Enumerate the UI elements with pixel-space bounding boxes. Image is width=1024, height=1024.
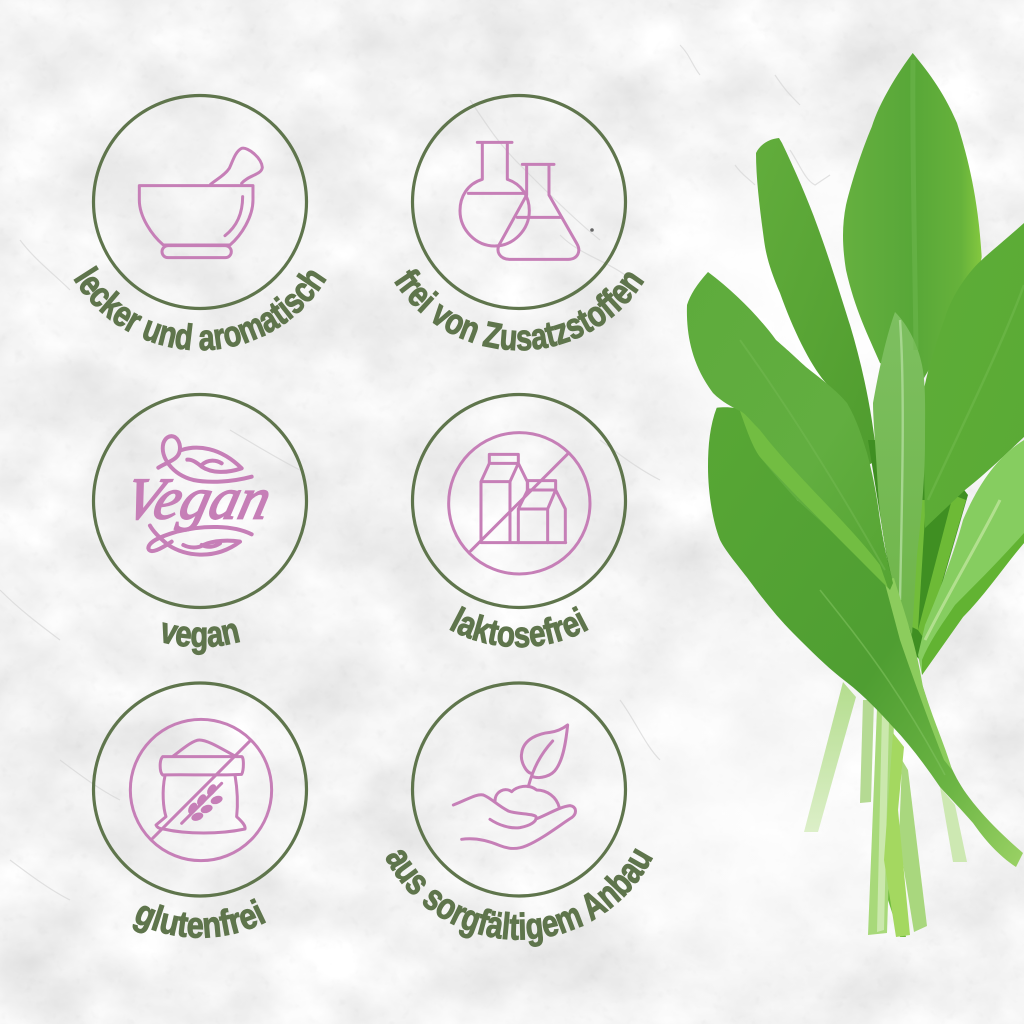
illustration: wild garlic bunch	[687, 53, 1024, 937]
badge ring	[412, 394, 626, 608]
leaf: lower right light	[918, 440, 1024, 675]
leaf: top centre	[843, 53, 982, 385]
leaf: narrow upper left	[756, 138, 877, 470]
icon: mortar and pestle	[139, 148, 262, 258]
label: frei von Zusatzstoffen: frei von Zusatzstoffen	[394, 269, 644, 351]
badge ring	[94, 683, 306, 896]
stem: crossing	[884, 578, 952, 770]
script word: Vegan	[118, 466, 278, 532]
panel: aus sorgfältigem Anbau	[386, 681, 654, 947]
icon: vegan script logo	[118, 436, 278, 555]
badge ring	[412, 683, 626, 896]
badge ring	[412, 96, 626, 308]
badge ring	[94, 96, 306, 308]
flourishes	[148, 436, 252, 555]
panel: vegan	[92, 392, 308, 656]
stems lower	[804, 682, 967, 937]
rib: centre leaf	[900, 320, 903, 600]
icon: no gluten flour bag	[130, 719, 272, 861]
rim: middle left leaf	[740, 411, 888, 588]
label: laktosefrei: laktosefrei	[449, 606, 589, 648]
rib: lower right leaf	[925, 500, 1000, 640]
rib: lower left leaf	[820, 590, 945, 775]
leaf: right large	[923, 223, 1024, 528]
label: lecker und aromatisch: lecker und aromatisch	[73, 265, 327, 351]
icon: no milk cartons	[449, 433, 590, 574]
leaf: lower left large	[708, 407, 1023, 867]
dark gap and upper stems	[868, 440, 968, 660]
panel: lecker und aromatisch	[73, 94, 327, 351]
label: glutenfrei: glutenfrei	[132, 898, 266, 938]
icon: hand with sprout	[453, 725, 575, 849]
rib: middle left leaf	[740, 340, 885, 570]
rib: top centre leaf	[913, 60, 916, 350]
label: vegan: vegan	[162, 622, 240, 656]
panel: frei von Zusatzstoffen	[394, 94, 644, 351]
icon: laboratory flasks	[460, 142, 579, 259]
panel: glutenfrei	[92, 681, 308, 938]
leaf: centre light	[873, 312, 925, 635]
leaf: middle left	[687, 272, 893, 590]
panel: laktosefrei	[410, 392, 628, 648]
leaf edge: lower right	[922, 533, 1024, 675]
label: aus sorgfältigem Anbau: aus sorgfältigem Anbau	[386, 848, 654, 947]
badge ring	[94, 394, 306, 608]
rib: right leaf	[928, 285, 1024, 500]
